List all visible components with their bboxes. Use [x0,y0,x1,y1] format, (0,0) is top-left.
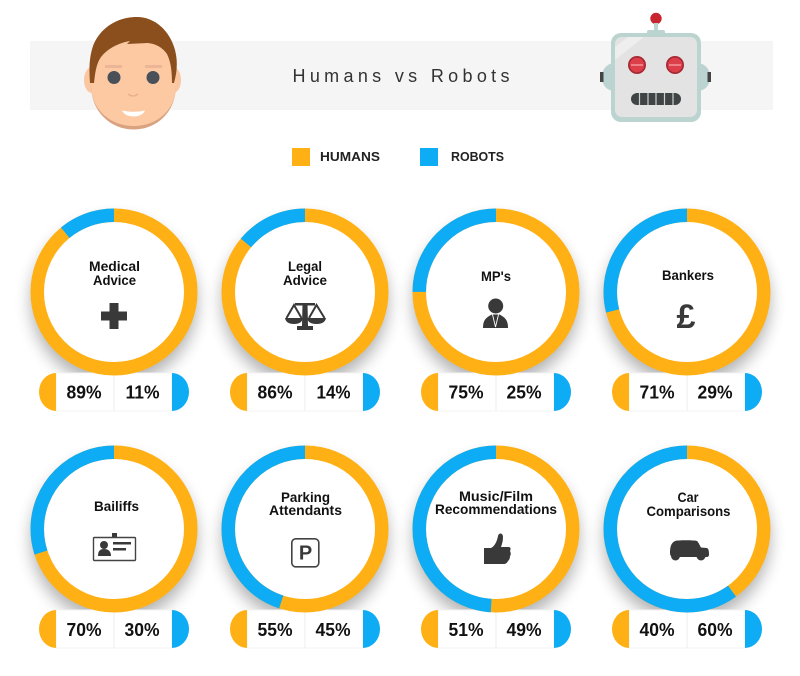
panel: music film recommendations: 51% [448,619,484,640]
panel: medical advice: Medical [89,258,140,274]
panel: car comparisons: Car [678,489,699,505]
panel: bailiffs: Bailiffs [94,498,139,514]
panel: car comparisons [604,452,770,648]
panel: legal advice: 86% [258,382,292,402]
panel: bankers: 71% [640,382,674,402]
panel: MPs: 75% [448,382,484,402]
panel: car comparisons: Comparisons [646,503,731,519]
panel: bailiffs [31,452,197,648]
panel: parking attendants: 45% [316,619,350,640]
panel: parking attendants: Attendants [269,502,342,518]
panel: parking attendants: P [299,542,312,564]
panel: parking attendants: Parking [281,489,330,505]
panel: legal advice: Legal [288,258,322,274]
panel: bankers: Bankers [662,267,714,283]
panel: MPs: 25% [506,382,542,402]
panel: medical advice: 89% [66,382,102,402]
legend [292,148,504,166]
panel: car comparisons: 60% [698,619,732,640]
panel: legal advice: 14% [316,382,350,402]
panel: legal advice: Advice [283,272,327,288]
panel: medical advice [31,215,197,411]
panel: music film recommendations: Music/Film [459,488,533,504]
icon: human face [84,17,181,130]
panel: legal advice [222,215,388,411]
legend: HUMANS [320,149,380,164]
panel: bankers [604,215,770,411]
panel: MPs: MP's [481,268,511,284]
panel: music film recommendations: 49% [506,619,542,640]
title banner [30,41,773,110]
panel: parking attendants [222,452,388,648]
panel: medical advice: 11% [126,382,160,402]
panel: music film recommendations: Recommendations [435,501,557,517]
panel: MPs [413,215,579,411]
legend: ROBOTS [451,149,504,164]
panel: medical advice: Advice [93,272,136,288]
panel: parking attendants: 55% [258,619,292,640]
panel: car comparisons: 40% [640,619,674,640]
panel: bailiffs: 70% [66,619,102,640]
panel: music film recommendations [413,452,579,648]
icon: robot head [600,13,711,122]
panel: bankers: £ [677,298,696,336]
panel: bailiffs: 30% [124,619,160,640]
panel: bankers: 29% [698,382,732,402]
title: Humans vs Robots [292,66,510,86]
